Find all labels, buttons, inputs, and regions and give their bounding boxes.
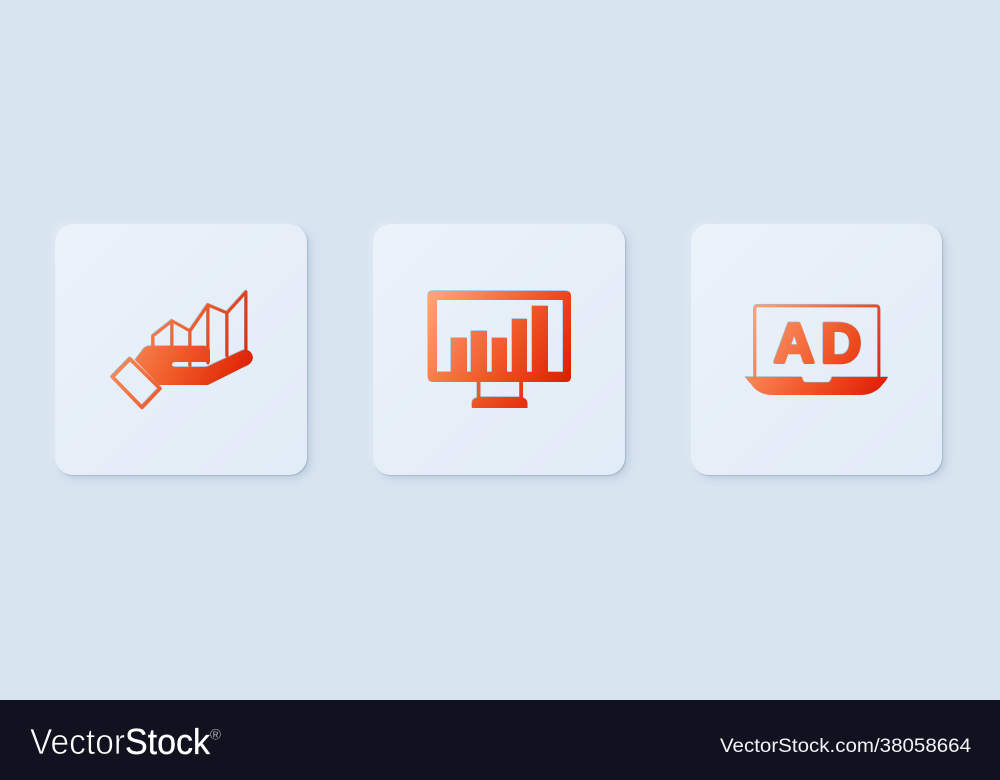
logo: VectorStock xyxy=(30,721,221,762)
panel: hand card xyxy=(55,224,307,475)
panel: laptop card xyxy=(691,224,942,475)
footer bar xyxy=(0,700,1000,780)
logo: VectorStock: ® xyxy=(210,726,221,744)
icon: hand holding growth chart xyxy=(112,292,253,408)
icon: monitor with bar chart xyxy=(428,291,571,408)
panel: monitor card xyxy=(373,224,625,475)
AD label: D xyxy=(821,311,861,374)
logo: VectorStock: Vector xyxy=(30,721,125,762)
icon: laptop with AD xyxy=(745,306,888,395)
image id url: VectorStock.com/38058664 xyxy=(720,736,971,757)
AD label: A xyxy=(774,311,814,374)
logo: VectorStock: Stock xyxy=(125,721,211,762)
